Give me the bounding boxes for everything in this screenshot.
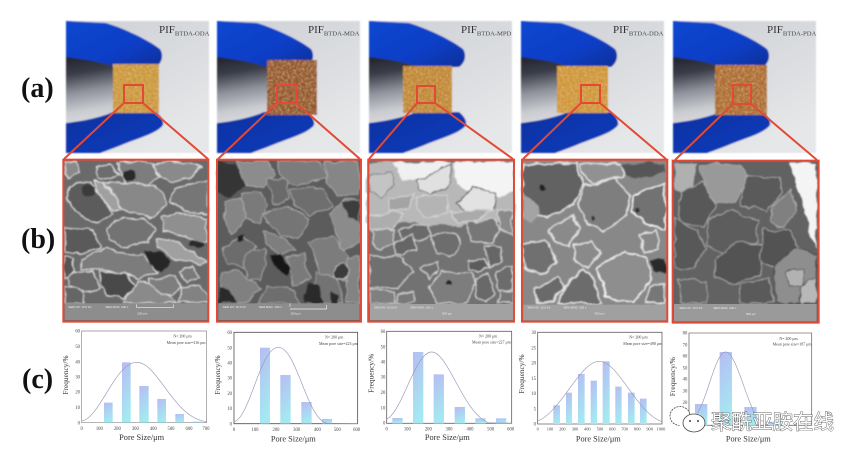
histogram 3: 40 bbox=[381, 361, 386, 366]
red frame bbox=[522, 160, 667, 322]
histogram 2: 300 bbox=[293, 428, 301, 433]
zoom callout 3: red square and lines bbox=[369, 86, 513, 159]
histogram 4: 10 bbox=[531, 392, 537, 397]
histogram 3: 60 bbox=[381, 330, 386, 335]
histogram 4: 30 bbox=[531, 331, 537, 336]
histogram 4 bbox=[517, 331, 665, 443]
histogram 3: 0 bbox=[383, 422, 386, 427]
histogram 2: 40 bbox=[227, 361, 233, 366]
histogram 3: 200 bbox=[425, 427, 432, 432]
histogram 4: 200 bbox=[559, 427, 566, 432]
histogram 3: 50 bbox=[381, 345, 386, 350]
histogram 5: 70 bbox=[683, 343, 688, 348]
photo: PIF BTDA-DDA sample in gloved hand bbox=[521, 21, 664, 153]
photo label: PIF BTDA-PDA: BTDA-PDA bbox=[783, 30, 816, 38]
red frame bbox=[217, 160, 361, 322]
histogram 5: 80 bbox=[683, 332, 688, 337]
histogram 4: 5 bbox=[534, 407, 537, 412]
histogram 2: 0 bbox=[233, 428, 236, 433]
row label (a): (a) bbox=[21, 73, 54, 104]
histogram 4: 25 bbox=[531, 346, 537, 351]
SEM image 4: SEM MAG: 100 x bbox=[563, 306, 587, 310]
histogram 4: Frequency/% bbox=[517, 354, 526, 394]
histogram 4: Mean pore size=498 μm bbox=[623, 341, 663, 346]
histogram 1: 50 bbox=[75, 345, 81, 350]
zoom callout 5: red square and lines bbox=[675, 85, 817, 160]
zoom callout 2: red square and lines bbox=[218, 85, 360, 159]
zoom callout 4: red square and lines bbox=[523, 85, 666, 159]
photo label: PIF BTDA-MPD: BTDA-MPD bbox=[477, 30, 512, 38]
histogram 3: 500 bbox=[487, 427, 495, 432]
SEM image 1: SEM HV: 10.0 kV bbox=[68, 305, 91, 309]
histogram 1: 20 bbox=[75, 391, 81, 396]
photo: PIF BTDA-ODA sample in gloved hand bbox=[66, 21, 209, 153]
histogram 3: Frequency/% bbox=[366, 354, 375, 393]
histogram 5: Pore Size/μm bbox=[726, 435, 771, 444]
histogram 3: 100 bbox=[404, 427, 411, 432]
SEM image 2: SEM MAG: 100 x bbox=[259, 305, 282, 309]
photo label: PIF BTDA-DDA: PIF bbox=[613, 24, 629, 36]
histogram 1: 30 bbox=[75, 375, 81, 380]
histogram 2: 60 bbox=[227, 331, 233, 336]
SEM image 1: SEM MAG: 100 x bbox=[105, 305, 129, 309]
histogram 3: 30 bbox=[381, 376, 386, 381]
SEM image 3: SEM MAG: 100 x bbox=[410, 305, 434, 309]
histogram 2: Mean pore size=223 μm bbox=[319, 341, 359, 346]
SEM image 5: 500 μm bbox=[746, 312, 757, 316]
histogram 4: 500 bbox=[597, 427, 603, 432]
row label (c): (c) bbox=[22, 364, 53, 395]
histogram 3: 400 bbox=[466, 427, 474, 432]
red frame bbox=[368, 160, 514, 322]
histogram 1: 40 bbox=[75, 360, 81, 365]
histogram 1: 60 bbox=[75, 330, 81, 335]
photo: PIF BTDA-MPD sample in gloved hand bbox=[369, 21, 512, 153]
histogram 4: 300 bbox=[572, 427, 578, 432]
histogram 1: 400 bbox=[150, 427, 157, 432]
photo label: PIF BTDA-MPD: PIF bbox=[461, 24, 477, 36]
histogram 1: 0 bbox=[81, 427, 84, 432]
histogram 3: Pore Size/μm bbox=[425, 433, 470, 442]
histogram 2: 400 bbox=[314, 428, 321, 433]
photo: PIF BTDA-PDA sample in gloved hand bbox=[673, 21, 816, 153]
histogram 2: 200 bbox=[272, 428, 280, 433]
histogram 2 bbox=[213, 331, 361, 443]
SEM image 4: 500 μm bbox=[595, 311, 605, 315]
SEM image 1: 200 μm bbox=[137, 311, 148, 315]
histogram 4: 400 bbox=[584, 427, 591, 432]
watermark: WeChat icon bbox=[670, 406, 705, 434]
histogram 1: Mean pore size=316 μm bbox=[167, 340, 206, 345]
watermark: account name: 聚酰亚胺在线 bbox=[711, 411, 834, 434]
histogram 3: 0 bbox=[385, 427, 388, 432]
histogram 2: Frequency/% bbox=[213, 355, 222, 395]
histogram 3: 10 bbox=[381, 406, 386, 411]
zoom callout 1: red square and lines bbox=[64, 85, 208, 159]
histogram 1: 600 bbox=[185, 427, 193, 432]
row label (b): (b) bbox=[21, 224, 55, 255]
histogram 4: 100 bbox=[547, 427, 553, 432]
photo label: PIF BTDA-MDA: BTDA-MDA bbox=[324, 30, 360, 38]
photo label: PIF BTDA-DDA: BTDA-DDA bbox=[629, 30, 664, 38]
histogram 5: 20 bbox=[683, 401, 688, 406]
histogram 4: 15 bbox=[531, 377, 537, 382]
histogram 1: 0 bbox=[78, 421, 81, 426]
histogram 4: 600 bbox=[609, 427, 616, 432]
histogram 4: 700 bbox=[621, 427, 628, 432]
histogram 3: 600 bbox=[507, 427, 515, 432]
histogram 4: 900 bbox=[646, 427, 653, 432]
histogram 3: N= 200 μm bbox=[479, 333, 498, 338]
histogram 4: N= 200 μm bbox=[629, 335, 649, 340]
histogram 4: 800 bbox=[634, 427, 641, 432]
SEM image 1 bbox=[63, 160, 209, 322]
histogram 1 bbox=[61, 330, 210, 442]
histogram 1: 700 bbox=[202, 427, 210, 432]
histogram 5: Frequency/% bbox=[668, 357, 677, 396]
histogram 4: Pore Size/μm bbox=[576, 434, 621, 443]
histogram 2: 600 bbox=[353, 428, 361, 433]
histogram 2: Pore Size/μm bbox=[271, 434, 316, 443]
histogram 2: 10 bbox=[227, 407, 233, 412]
SEM image 4: SEM HV: 10.0 kV bbox=[527, 306, 550, 310]
SEM image 5: SEM MAG: 100 x bbox=[713, 306, 737, 310]
photo label: PIF BTDA-MDA: PIF bbox=[308, 24, 324, 36]
histogram 1: Frequency/% bbox=[61, 355, 70, 395]
histogram 1: 10 bbox=[75, 406, 81, 411]
SEM image 5: SEM HV: 10.0 kV bbox=[679, 306, 702, 310]
histogram 1: 300 bbox=[132, 427, 139, 432]
SEM image 4 bbox=[521, 160, 668, 322]
histogram 5: 50 bbox=[683, 366, 688, 371]
histogram 2: 30 bbox=[227, 377, 233, 382]
histogram 4: 1000 bbox=[657, 427, 665, 432]
histogram 5: 40 bbox=[683, 378, 688, 383]
histogram 1: 100 bbox=[96, 427, 103, 432]
histogram 2: 100 bbox=[251, 428, 259, 433]
histogram 2: 20 bbox=[227, 392, 233, 397]
SEM image 3 bbox=[367, 160, 515, 322]
histogram 1: 200 bbox=[114, 427, 121, 432]
histogram 2: 50 bbox=[227, 346, 233, 351]
histogram 4: 20 bbox=[531, 362, 537, 367]
histogram 5: Mean pore size=187 μm bbox=[773, 342, 812, 347]
SEM image 2 bbox=[217, 160, 361, 322]
photo label: PIF BTDA-ODA: PIF bbox=[159, 24, 175, 36]
histogram 2: 0 bbox=[230, 422, 233, 427]
histogram 4: 0 bbox=[534, 423, 537, 428]
SEM image 5 bbox=[672, 160, 819, 323]
SEM image 2: 200 μm bbox=[291, 311, 301, 315]
photo: PIF BTDA-MDA sample in gloved hand bbox=[217, 21, 360, 153]
photo label: PIF BTDA-ODA: BTDA-ODA bbox=[175, 30, 210, 38]
histogram 5: 60 bbox=[683, 355, 688, 360]
histogram 3: 20 bbox=[381, 391, 386, 396]
red frame bbox=[63, 160, 208, 322]
histogram 3: Mean pore size=227 μm bbox=[472, 340, 512, 345]
histogram 4: 0 bbox=[537, 427, 539, 432]
histogram 2: 500 bbox=[334, 428, 341, 433]
histogram 3: 300 bbox=[445, 427, 453, 432]
histogram 5: N= 200 μm bbox=[779, 336, 799, 341]
histogram 5: 30 bbox=[683, 389, 688, 394]
histogram 3 bbox=[366, 330, 515, 442]
SEM image 3: SEM HV: 10.0 kV bbox=[374, 305, 397, 309]
red frame bbox=[673, 161, 819, 323]
histogram 1: 500 bbox=[167, 427, 175, 432]
histogram 1: N= 200 μm bbox=[173, 333, 193, 338]
SEM image 3: 500 μm bbox=[442, 311, 453, 315]
histogram 2: N= 200 μm bbox=[325, 335, 344, 340]
SEM image 2: SEM HV: 10.0 kV bbox=[223, 305, 246, 309]
histogram 1: Pore Size/μm bbox=[119, 433, 165, 442]
photo label: PIF BTDA-PDA: PIF bbox=[767, 24, 783, 36]
histogram 5 bbox=[668, 332, 812, 444]
